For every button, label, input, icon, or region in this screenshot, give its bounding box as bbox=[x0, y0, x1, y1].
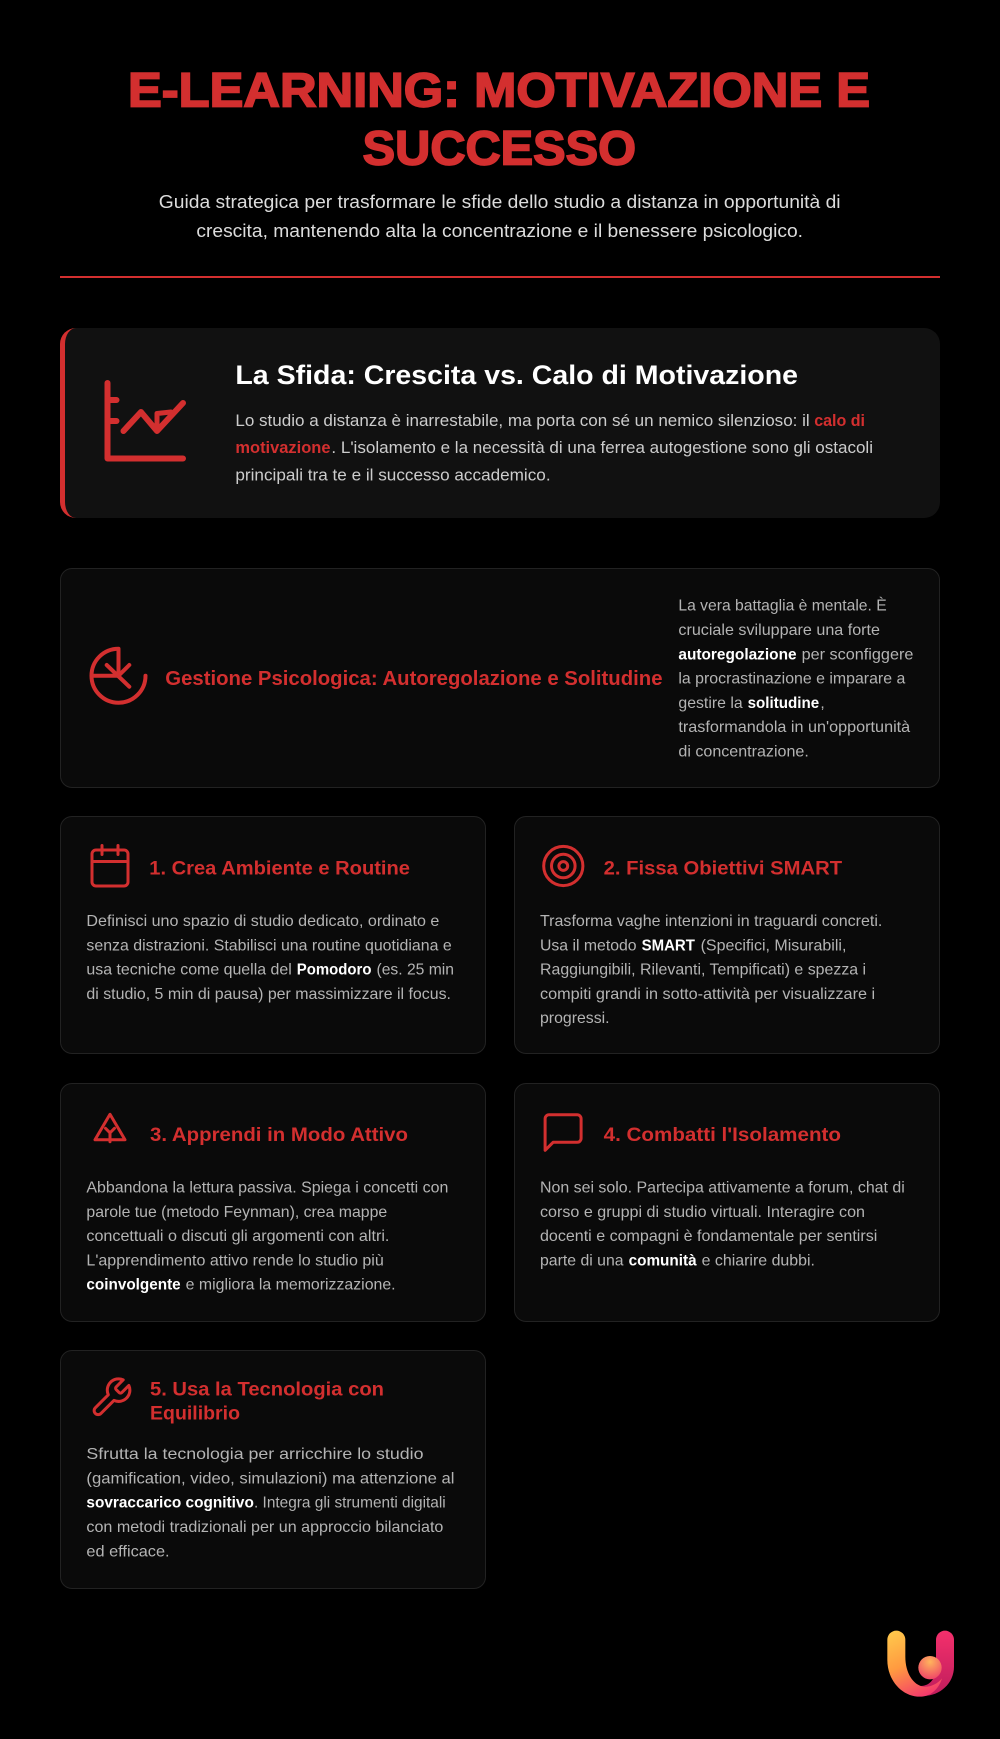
text 2: SMART bbox=[642, 937, 696, 954]
title bbox=[128, 64, 870, 176]
text: la sfida: principali tra te e il successo accademico. bbox=[235, 466, 551, 484]
text 3: e migliora la memorizzazione. bbox=[186, 1277, 396, 1294]
text 4: e chiarire dubbi. bbox=[702, 1253, 815, 1270]
text: la sfida: Lo studio a distanza è inarrestabile, ma porta con sé un nemico silenzioso: il bbox=[235, 412, 810, 430]
text 5: ed efficace. bbox=[86, 1544, 170, 1561]
title: SUCCESSO bbox=[363, 122, 636, 176]
heading 4: 4. Combatti l'Isolamento bbox=[604, 1124, 841, 1146]
text: la sfida bbox=[235, 412, 873, 484]
card 2: obiettivi smart bbox=[514, 816, 940, 1054]
text 2: (Specifici, Misurabili, bbox=[701, 937, 847, 954]
panel: la sfida bbox=[60, 328, 940, 518]
icon: wrench bbox=[94, 1379, 130, 1415]
text: la sfida: motivazione bbox=[235, 439, 330, 457]
text 5: sovraccarico cognitivo bbox=[86, 1495, 254, 1512]
text: gestione psicologica: gestire la bbox=[678, 695, 743, 712]
text: gestione psicologica: cruciale sviluppare una forte bbox=[678, 622, 880, 639]
logo bbox=[887, 1630, 954, 1697]
text: gestione psicologica: solitudine bbox=[748, 695, 820, 712]
text: gestione psicologica bbox=[678, 596, 913, 760]
text 3: Abbandona la lettura passiva. Spiega i concetti con bbox=[86, 1180, 448, 1197]
text 1 bbox=[86, 913, 454, 1003]
text 4 bbox=[540, 1180, 905, 1270]
text: gestione psicologica: , bbox=[820, 695, 825, 712]
icon: chat bubble bbox=[545, 1115, 581, 1150]
heading 5: 5. Usa la Tecnologia con bbox=[150, 1379, 384, 1401]
icon: target bbox=[544, 846, 583, 886]
text 2 bbox=[540, 913, 883, 1027]
text 4: parte di una bbox=[540, 1253, 624, 1270]
text: la sfida: . L'isolamento e la necessità di una ferrea autogestione sono gli ostacoli bbox=[331, 439, 873, 457]
heading: la sfida: La Sfida: Crescita vs. Calo di Motivazione bbox=[235, 360, 798, 390]
heading 1: 1. Crea Ambiente e Routine bbox=[149, 857, 410, 879]
text 1: di studio, 5 min di pausa) per massimizzare il focus. bbox=[86, 986, 451, 1003]
text 1: usa tecniche come quella del bbox=[86, 962, 292, 979]
card 4: isolamento bbox=[514, 1083, 940, 1322]
text 2: Trasforma vaghe intenzioni in traguardi concreti. bbox=[540, 913, 883, 930]
text 5: (gamification, video, simulazioni) ma attenzione al bbox=[86, 1471, 455, 1488]
text 4: corso e gruppi di studio virtuali. Interagire con bbox=[540, 1204, 865, 1221]
heading 5: Equilibrio bbox=[150, 1403, 240, 1425]
heading 5 bbox=[150, 1379, 384, 1425]
subtitle bbox=[159, 191, 841, 241]
panel: gestione psicologica bbox=[60, 568, 940, 788]
text 2: Usa il metodo bbox=[540, 937, 637, 954]
text 1: Definisci uno spazio di studio dedicato, ordinato e bbox=[86, 913, 439, 930]
text 3: coinvolgente bbox=[86, 1277, 181, 1294]
text: gestione psicologica: autoregolazione bbox=[678, 646, 797, 663]
text 4: docenti e compagni è fondamentale per sentirsi bbox=[540, 1228, 878, 1245]
text 2: Raggiungibili, Rilevanti, Tempificati) e spezza i bbox=[540, 962, 866, 979]
header bbox=[60, 64, 940, 278]
icon: pie chart bbox=[92, 649, 146, 703]
text 3: L'apprendimento attivo rende lo studio più bbox=[86, 1253, 384, 1270]
text 5: Sfrutta la tecnologia per arricchire lo studio bbox=[86, 1446, 424, 1463]
text 4: comunità bbox=[629, 1253, 697, 1270]
text 2: progressi. bbox=[540, 1010, 610, 1027]
title: E-LEARNING: MOTIVAZIONE E bbox=[128, 64, 870, 118]
text 3 bbox=[86, 1180, 448, 1294]
heading: gestione psicologica: Gestione Psicologica: Autoregolazione e Solitudine bbox=[165, 668, 663, 690]
divider bbox=[60, 276, 940, 278]
icon: line chart bbox=[108, 383, 183, 458]
text 5: con metodi tradizionali per un approccio bilanciato bbox=[86, 1519, 444, 1536]
text 5: . Integra gli strumenti digitali bbox=[254, 1495, 446, 1512]
text 3: parole tue (metodo Feynman), crea mappe bbox=[86, 1204, 387, 1221]
card 3: apprendimento attivo bbox=[60, 1083, 486, 1322]
card 1: ambiente e routine bbox=[60, 816, 486, 1054]
subtitle: Guida strategica per trasformare le sfide dello studio a distanza in opportunità di bbox=[159, 191, 841, 212]
text: gestione psicologica: la procrastinazione e imparare a bbox=[678, 671, 906, 688]
text: gestione psicologica: trasformandola in un'opportunità bbox=[678, 719, 911, 736]
subtitle: crescita, mantenendo alta la concentrazione e il benessere psicologico. bbox=[196, 220, 803, 241]
icon: calendar bbox=[92, 846, 128, 886]
heading 3: 3. Apprendi in Modo Attivo bbox=[150, 1124, 408, 1146]
text: la sfida: calo di bbox=[814, 412, 865, 430]
text: gestione psicologica: di concentrazione. bbox=[678, 744, 809, 760]
heading 2: 2. Fissa Obiettivi SMART bbox=[604, 857, 843, 879]
text 5 bbox=[86, 1446, 455, 1561]
card 5: tecnologia bbox=[60, 1350, 486, 1589]
text 1: senza distrazioni. Stabilisci una routine quotidiana e bbox=[86, 937, 452, 954]
text 1: (es. 25 min bbox=[376, 962, 454, 979]
text: gestione psicologica: per sconfiggere bbox=[802, 646, 913, 663]
text 2: compiti grandi in sotto-attività per visualizzare i bbox=[540, 986, 875, 1003]
text 4: Non sei solo. Partecipa attivamente a forum, chat di bbox=[540, 1180, 905, 1197]
text: gestione psicologica: La vera battaglia è mentale. È bbox=[678, 596, 887, 615]
text 3: concettuali o discuti gli argomenti con altri. bbox=[86, 1228, 389, 1245]
icon: triangle bbox=[95, 1114, 125, 1142]
text 1: Pomodoro bbox=[297, 962, 372, 979]
